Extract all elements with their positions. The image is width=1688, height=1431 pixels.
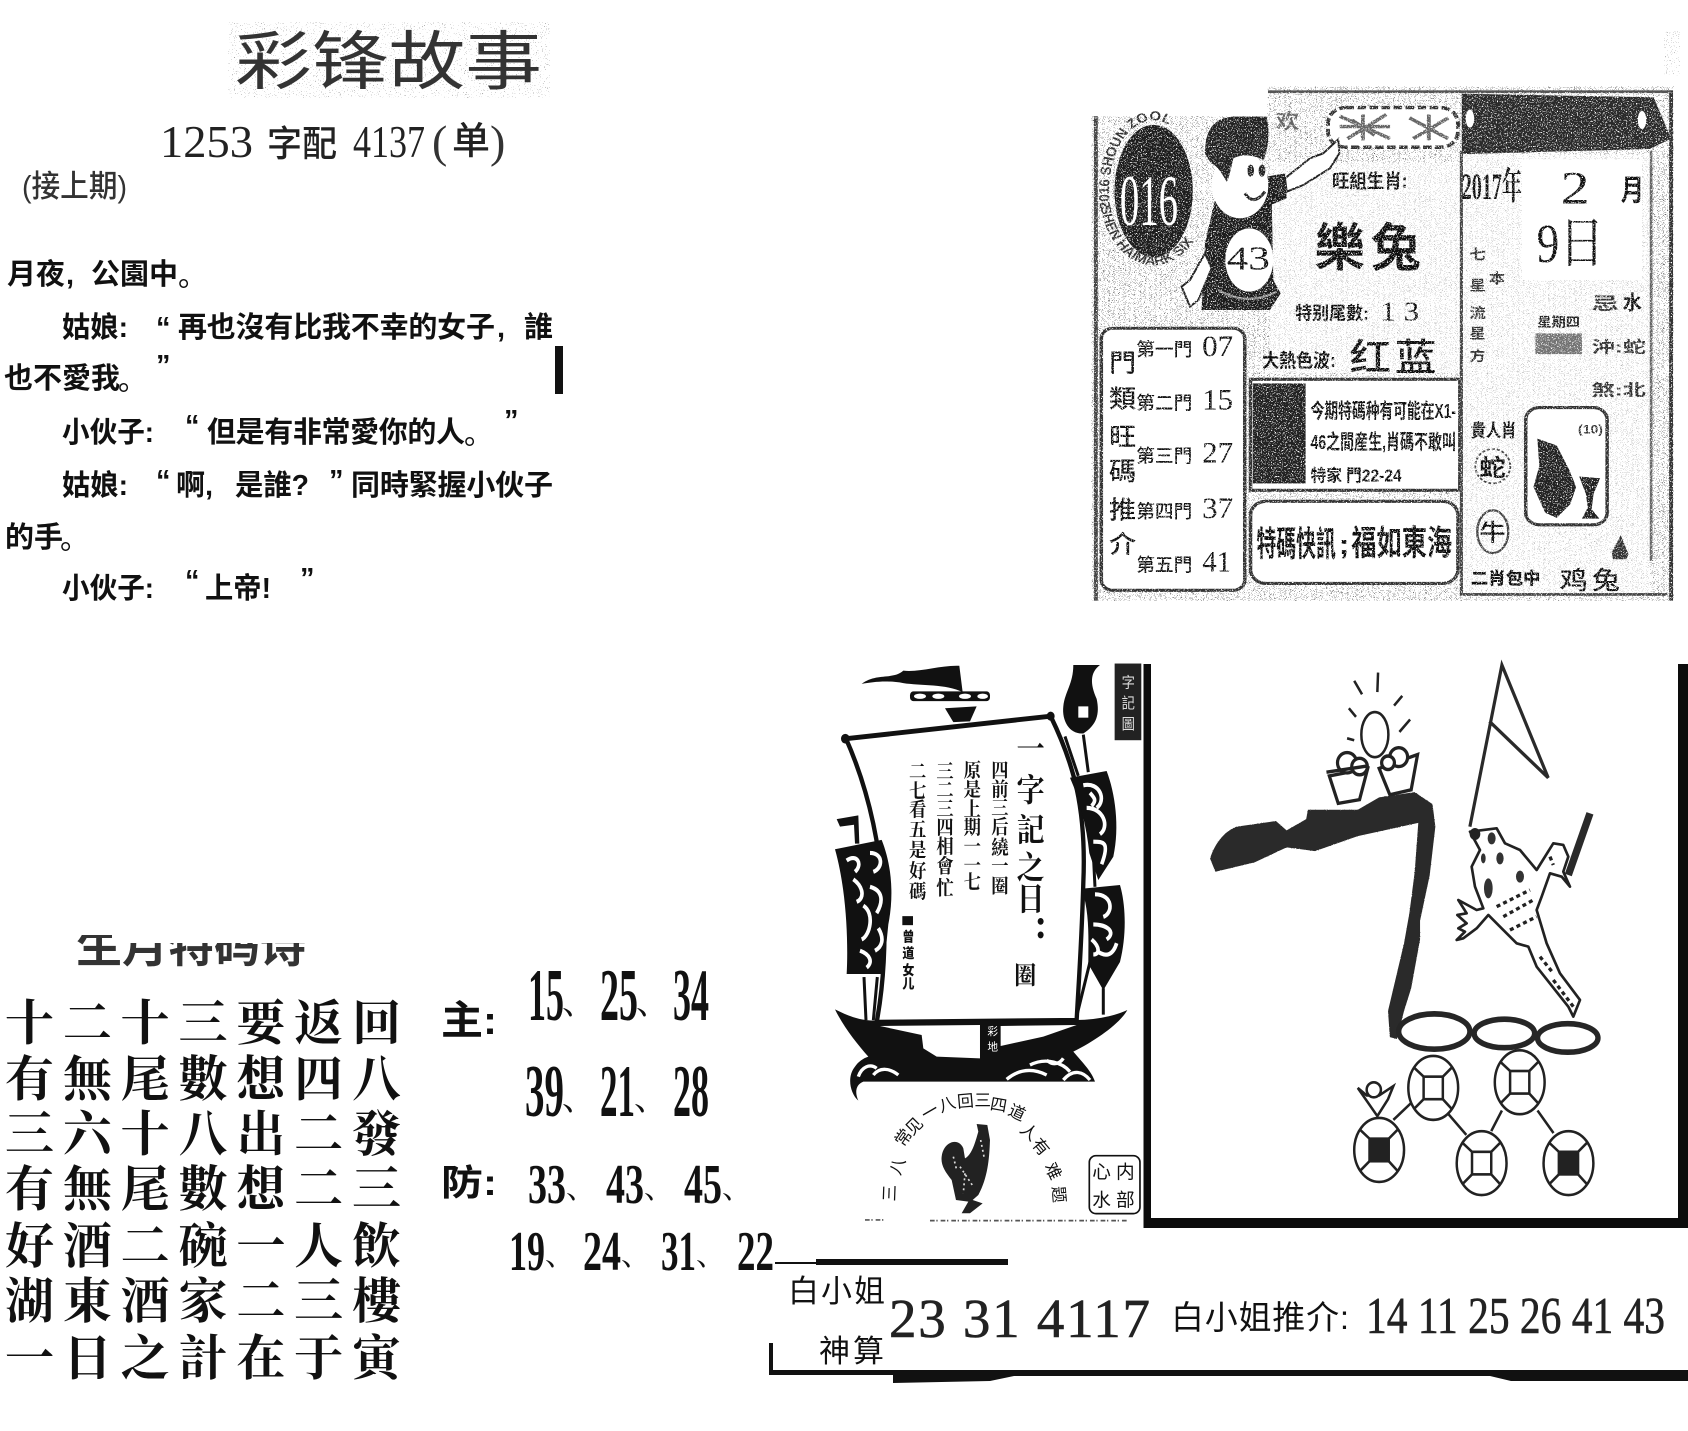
- calendar: 星: [1470, 325, 1486, 342]
- story text: 公園中: [91, 258, 178, 291]
- main numbers: 、: [562, 985, 596, 1022]
- guard numbers: 防:: [441, 1162, 497, 1203]
- frog with knife: [1457, 813, 1590, 1017]
- story text: 。: [464, 419, 493, 451]
- guard numbers: 19: [509, 1221, 545, 1283]
- sail poem: 二七看五是好碼: [909, 761, 927, 902]
- sail: [841, 712, 1084, 1022]
- guard numbers: 31: [661, 1221, 696, 1283]
- door recommendation box: 推: [1109, 496, 1136, 524]
- guard numbers: 、: [696, 1239, 726, 1272]
- zodiac tips: 1 3: [1380, 297, 1419, 327]
- circle badge 016: SHEN HAIMARK SIX: [1101, 206, 1194, 266]
- calendar: 2017年: [1462, 166, 1522, 207]
- picture puzzle drawing: [1210, 665, 1598, 1195]
- story text: 但是有非常愛你的人: [207, 416, 465, 449]
- door recommendation box: 介: [1109, 531, 1136, 559]
- title: 彩锋故事: [235, 26, 542, 98]
- poem: 湖東酒家二三樓: [5, 1274, 404, 1329]
- door recommendation box: 第四門: [1136, 502, 1192, 523]
- story text: 同時緊握小伙子: [351, 469, 553, 502]
- main numbers: 、: [634, 1081, 668, 1118]
- story text: ,: [497, 312, 505, 344]
- text: 28: [673, 1051, 709, 1133]
- subtitle: numbers: ): [490, 116, 505, 167]
- story text: 誰: [524, 311, 553, 344]
- author note: 曾道女儿: [902, 929, 915, 991]
- subtitle: numbers: 字配: [267, 123, 337, 164]
- poem: 十二十三要返回: [5, 996, 401, 1051]
- subtitle: numbers: [160, 116, 505, 167]
- door recommendation box: 27: [1202, 436, 1233, 469]
- zodiac tips: 红 蓝: [1349, 337, 1437, 379]
- fruit buckets: [1326, 748, 1418, 803]
- guard numbers: 22: [737, 1221, 774, 1283]
- calendar: 9日: [1537, 213, 1604, 274]
- door recommendation box: 旺: [1109, 423, 1136, 451]
- calendar: 蛇: [1479, 454, 1506, 481]
- Miss Bai numbers: 23 31 4117: [889, 1288, 1150, 1349]
- side label: 圖: [1122, 716, 1135, 733]
- main numbers: 21: [600, 1051, 635, 1133]
- story text: ”: [329, 465, 344, 497]
- rooster arc text: 三八常见一八回三四道人有难题: [880, 1091, 1069, 1204]
- door recommendation box: 41: [1202, 545, 1231, 578]
- story text: ,: [66, 259, 74, 291]
- story text: 小伙子:: [62, 572, 154, 605]
- guard numbers: 、: [545, 1239, 575, 1272]
- story text: 小伙子:: [62, 416, 154, 449]
- calendar: 七: [1470, 246, 1486, 263]
- guard numbers: 33: [528, 1154, 566, 1216]
- story text: 再也沒有比我不幸的女子: [178, 311, 495, 344]
- calendar: 沖:蛇: [1592, 337, 1646, 356]
- sail poem heading: [1014, 732, 1045, 990]
- calendar: 星期四: [1537, 314, 1580, 329]
- side label: 記: [1122, 695, 1135, 712]
- guard numbers: 、: [566, 1172, 596, 1205]
- door recommendation box: 第三門: [1136, 447, 1192, 467]
- subtitle: numbers: (: [432, 116, 447, 167]
- story text: “: [185, 410, 200, 442]
- story text: [4, 258, 553, 605]
- guard numbers: 24: [583, 1221, 621, 1283]
- calendar: 星: [1470, 277, 1486, 294]
- newspaper lottery panel: [1092, 86, 1674, 601]
- door recommendation box: [1101, 328, 1245, 590]
- story text: 上帝!: [205, 572, 271, 605]
- door recommendation box: 門: [1109, 349, 1136, 377]
- zodiac tips: 大熱色波:: [1262, 350, 1336, 372]
- door recommendation box: 37: [1202, 492, 1233, 524]
- zodiac tips: [1262, 171, 1437, 379]
- picture puzzle frame: [1144, 664, 1688, 1228]
- hull and rooster emblem: [835, 1009, 1140, 1221]
- poem: 一日之計在于寅: [5, 1331, 406, 1386]
- main numbers: 15: [528, 955, 564, 1037]
- guard numbers: 45: [684, 1154, 722, 1216]
- story text: 是誰?: [235, 469, 309, 502]
- continued label: (接上期): [22, 169, 127, 204]
- circle badge 016: [1098, 111, 1194, 266]
- scan mark: [555, 346, 563, 394]
- story text: “: [156, 312, 170, 344]
- circle badge 016: 016: [1120, 160, 1178, 241]
- calendar: 2: [1561, 162, 1590, 214]
- door recommendation box: 07: [1202, 330, 1233, 362]
- stamp: heart water: 水: [1092, 1190, 1111, 1211]
- door recommendation box: 第一門: [1136, 340, 1192, 361]
- story text: 。: [178, 261, 207, 293]
- poem heading: [70, 905, 322, 972]
- rigging: [837, 665, 1100, 844]
- bottom rule: [769, 1343, 1688, 1383]
- Miss Bai label: 神算: [819, 1334, 884, 1369]
- story text: “: [185, 565, 200, 597]
- egg and rays: [1347, 673, 1410, 757]
- story text: ”: [504, 405, 518, 437]
- newspaper wear overlay: [1090, 92, 1680, 612]
- rooster: [942, 1124, 990, 1213]
- guard numbers: 、: [621, 1239, 651, 1272]
- numeral seven stroke: [1210, 792, 1435, 1039]
- stamp: heart water: 部: [1116, 1190, 1135, 1211]
- tip box: 46之間産生,肖碼不敢叫: [1311, 430, 1456, 454]
- calendar: 鸡 兔: [1560, 566, 1620, 595]
- poem: 好酒二碗一人飲: [5, 1219, 401, 1274]
- banners: [835, 771, 1125, 990]
- story text: “: [156, 465, 170, 497]
- top rule: [775, 1262, 1008, 1263]
- poem: 有無尾數想二三: [5, 1162, 401, 1217]
- sail poem: [909, 760, 1009, 902]
- flash tip box: 福如東海: [1351, 524, 1452, 563]
- story text: 也不愛我: [4, 362, 120, 395]
- story text: 姑娘:: [62, 311, 128, 344]
- main numbers: 主:: [441, 999, 497, 1043]
- subtitle: numbers: 单: [452, 121, 490, 163]
- sail poem: 原是上期一一七: [964, 760, 982, 893]
- sail poem heading: 一字記之日: [1017, 732, 1045, 918]
- main numbers: 、: [562, 1081, 596, 1118]
- tip box: 今期特碼种有可能在X1-: [1311, 399, 1456, 423]
- poem: 三六十八出二發: [5, 1107, 401, 1162]
- story text: 月夜: [7, 258, 65, 291]
- subtitle: numbers: 4137: [353, 116, 425, 167]
- door recommendation box: 碼: [1109, 457, 1136, 486]
- stepping stones: [1399, 1014, 1598, 1052]
- calendar: 流: [1470, 304, 1486, 322]
- flash tip box: ;: [1339, 530, 1349, 561]
- side label: [1115, 664, 1141, 740]
- stamp: heart water: [1089, 1156, 1140, 1214]
- flash tip box: 特碼快訊: [1256, 525, 1336, 563]
- Miss Bai recommendations: [1171, 1288, 1665, 1345]
- main numbers: 39: [525, 1051, 564, 1133]
- main numbers: 25: [600, 955, 638, 1037]
- hull: [835, 1009, 1127, 1101]
- calendar: (10): [1578, 422, 1603, 436]
- stamp: heart water: 内: [1116, 1161, 1135, 1182]
- zodiac tips: 旺組生肖:: [1332, 171, 1408, 192]
- zodiac tips: 兔: [1371, 219, 1421, 277]
- door recommendation box: 類: [1109, 385, 1136, 413]
- poem: [5, 996, 406, 1386]
- sail poem: 三二三四相會忙: [936, 761, 954, 899]
- Miss Bai recommendations: 白小姐推介:: [1171, 1299, 1349, 1336]
- tip box: [1251, 379, 1460, 490]
- flash tip box: [1251, 501, 1458, 583]
- sailboat panel: [835, 664, 1141, 1022]
- hull: 彩: [987, 1026, 998, 1038]
- sail poem heading: 圈: [1014, 962, 1036, 990]
- story text: ”: [156, 350, 170, 382]
- calendar: [1460, 94, 1671, 596]
- guard numbers: 、: [722, 1172, 752, 1205]
- calendar: 水: [1623, 291, 1642, 314]
- calendar: 二肖包中: [1471, 569, 1540, 588]
- zodiac tips: 樂: [1314, 219, 1365, 277]
- subtitle: numbers: 1253: [160, 116, 253, 167]
- door recommendation box: 15: [1202, 383, 1233, 416]
- boy mascot: 43: [1227, 240, 1270, 277]
- guard numbers: [441, 1154, 774, 1283]
- Miss Bai label: 白小姐: [788, 1274, 885, 1309]
- poem heading: 生月特码诗: [76, 923, 306, 972]
- faint corner mark: [1664, 30, 1680, 76]
- calendar: 本: [1489, 270, 1505, 287]
- boy mascot: [1182, 117, 1339, 310]
- story text: 。: [118, 365, 147, 397]
- flag: [1470, 665, 1548, 827]
- calendar: 煞:北: [1592, 381, 1646, 399]
- story text: 啊,: [176, 470, 213, 502]
- calendar: 月: [1621, 174, 1644, 207]
- guard numbers: 、: [644, 1172, 674, 1205]
- top banner: [1276, 108, 1458, 170]
- door recommendation box: 第二門: [1136, 393, 1192, 414]
- side label: 字: [1122, 675, 1135, 692]
- zodiac tips: 特别尾數:: [1295, 304, 1369, 324]
- main numbers: 、: [636, 985, 670, 1022]
- calendar: 忌: [1592, 293, 1619, 313]
- story text: 的手: [5, 521, 63, 554]
- text: 34: [673, 955, 709, 1037]
- tip box: 特家 門22-24: [1311, 466, 1402, 485]
- calendar: 牛: [1479, 520, 1506, 546]
- top banner: 欢: [1276, 109, 1299, 133]
- story text: 姑娘:: [62, 469, 128, 502]
- poem: 有無尾數想四八: [5, 1052, 401, 1107]
- calendar: 方: [1470, 347, 1486, 365]
- coin chain: [1354, 1050, 1593, 1195]
- calendar: 貴人肖: [1471, 421, 1516, 442]
- guard numbers: 43: [606, 1154, 644, 1216]
- story text: ”: [300, 563, 314, 595]
- main numbers: [441, 955, 709, 1133]
- circle badge 016: 2016 SHOUN ZOOL: [1098, 111, 1170, 208]
- Miss Bai label: [788, 1274, 885, 1369]
- sail poem: 四前三后繞一圈: [991, 760, 1009, 897]
- hull: 地: [987, 1041, 998, 1054]
- door recommendation box: 第五門: [1136, 555, 1192, 576]
- story text: 。: [60, 524, 89, 556]
- stamp: heart water: 心: [1092, 1161, 1111, 1182]
